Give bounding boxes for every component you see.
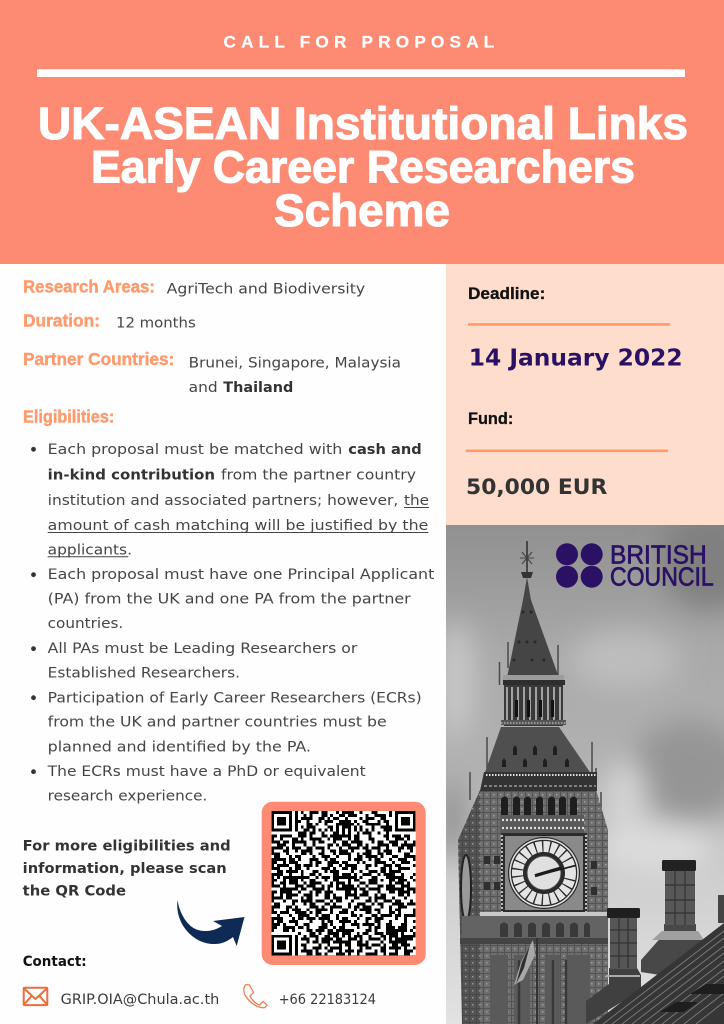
deadline rule: [468, 323, 670, 326]
research areas: AgriTech and Biodiversity: [167, 281, 365, 297]
bullet 3: [31, 641, 358, 682]
belfry lantern: [501, 675, 566, 726]
bullet 2: countries.: [48, 616, 123, 632]
contact heading: Contact:: [23, 954, 87, 970]
bullet 1: in-kind contribution: [48, 468, 215, 484]
bullet 4: planned and identified by the PA.: [48, 739, 311, 755]
more information prompt: [23, 838, 231, 900]
tower spire: [508, 541, 558, 675]
clock face: [508, 837, 580, 909]
bullet 5: [31, 764, 366, 804]
duration: [23, 310, 196, 331]
partner countries: Thailand: [223, 380, 293, 396]
fund amount: 50,000 EUR: [466, 475, 608, 500]
photo: Big Ben clock tower: [438, 510, 724, 1024]
side panels: [484, 856, 597, 895]
QR code modules: [271, 812, 416, 954]
partner countries: and: [189, 380, 218, 396]
bullet 4: [31, 690, 422, 755]
contact: [23, 954, 376, 1008]
email address: GRIP.OIA@Chula.ac.th: [61, 992, 219, 1008]
deadline date: 14 January 2022: [469, 343, 683, 371]
bullet 5: research experience.: [48, 788, 207, 804]
icon: envelope: [24, 988, 47, 1005]
chimneys: [586, 860, 724, 1024]
slate roof: [593, 923, 724, 1024]
logo: British Council: [556, 543, 714, 588]
bullet 1: the: [404, 493, 429, 509]
bullet 1: amount of cash matching will be justified by the: [48, 518, 428, 534]
header divider bar: [37, 69, 685, 77]
QR code panel: [262, 802, 426, 965]
bullet 4: Participation of Early Career Researchers (ECRs): [48, 690, 422, 706]
lower tower panels: [490, 955, 590, 1024]
bullet 4: from the UK and partner countries must be: [48, 715, 387, 731]
more information prompt: information, please scan: [23, 861, 227, 877]
clock frame: [501, 833, 587, 914]
tower upper roof: [485, 727, 590, 772]
deadline label: Deadline:: [468, 284, 545, 303]
bullet 1: cash and: [348, 442, 422, 458]
logo: British Council: COUNCIL: [610, 563, 714, 591]
research areas: [23, 276, 365, 297]
research areas: Research Areas:: [23, 276, 155, 296]
tower main shaft: [458, 772, 608, 1024]
fund label: Fund:: [468, 409, 513, 428]
partner countries: Partner Countries:: [23, 349, 174, 369]
partner countries: Brunei, Singapore, Malaysia: [189, 355, 401, 371]
phone number: +66 22183124: [279, 992, 376, 1008]
bullet 1: Each proposal must be matched with: [48, 442, 342, 458]
title: Scheme: [274, 185, 450, 236]
bullet 2: (PA) from the UK and one PA from the partner: [48, 591, 411, 607]
bullet 2: Each proposal must have one Principal Applicant: [48, 567, 435, 583]
bullet 3: Established Researchers.: [48, 666, 240, 682]
duration: Duration:: [23, 310, 100, 330]
belfry windows: [501, 796, 577, 815]
bullet 1: [31, 442, 429, 558]
band and arcade below clock: [480, 912, 608, 916]
bullet 5: The ECRs must have a PhD or equivalent: [47, 764, 366, 780]
more information prompt: the QR Code: [23, 884, 126, 900]
eligibility list: [31, 442, 435, 804]
duration: 12 months: [116, 315, 196, 331]
bullet 1: applicants.: [48, 542, 132, 558]
panel: key facts: [23, 276, 401, 427]
bullet 3: All PAs must be Leading Researchers or: [48, 641, 358, 657]
icon: phone: [244, 984, 267, 1008]
panel: deadline and fund: [446, 264, 724, 525]
title: [38, 98, 688, 236]
QR finder and alignment patterns: [271, 811, 416, 955]
logo: British Council: BRITISH: [610, 541, 707, 569]
arrow to QR code: [177, 900, 244, 946]
bullet 2: [31, 567, 435, 632]
title: Early Career Researchers: [91, 142, 635, 193]
panel: header banner: [0, 0, 724, 264]
bullet 1: from the partner country: [221, 468, 416, 484]
bullet 1: institution and associated partners; however,: [48, 493, 398, 509]
more information prompt: For more eligibilities and: [23, 838, 231, 854]
pinnacles: [470, 642, 601, 822]
clouds: [438, 510, 724, 875]
partner countries: [23, 349, 401, 396]
title: UK-ASEAN Institutional Links: [38, 98, 688, 149]
flag and flagpole: [514, 938, 537, 1024]
fund rule: [466, 450, 668, 452]
eligibilities heading: Eligibilities:: [23, 407, 114, 427]
kicker: call for proposal: CALL FOR PROPOSAL: [224, 33, 500, 51]
